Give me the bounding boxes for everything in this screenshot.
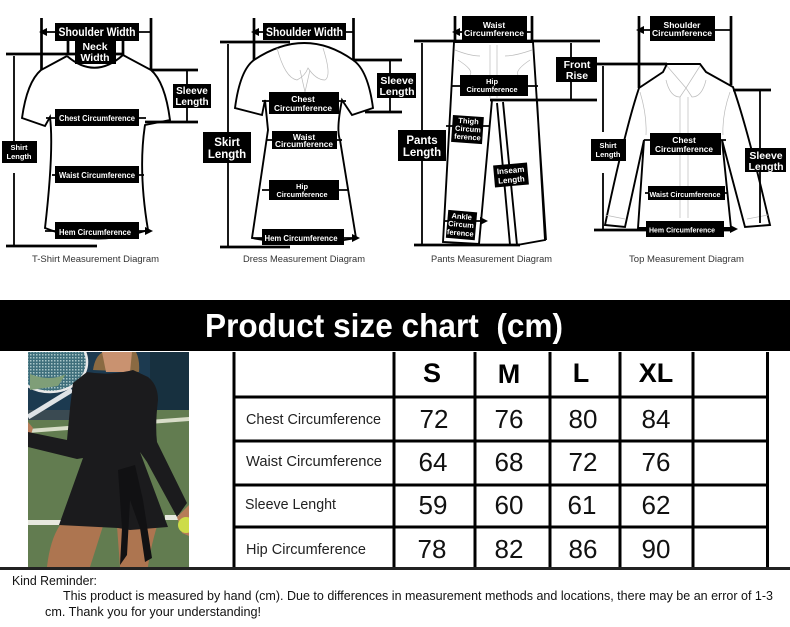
label: waist bbox=[648, 186, 725, 200]
label: thigh: Circum bbox=[455, 124, 482, 134]
label: ankle: Circum bbox=[448, 219, 475, 230]
row: hip circumference: 82 bbox=[495, 534, 523, 564]
label: pants length: Pants bbox=[406, 135, 438, 147]
t-shirt measure lines bbox=[6, 18, 198, 246]
label: hem bbox=[262, 229, 344, 245]
label: waist: Waist Circumference bbox=[59, 171, 135, 180]
label: hem: Hem Circumference bbox=[649, 226, 715, 234]
label: hip: Circumference bbox=[466, 85, 518, 94]
label: ankle bbox=[446, 210, 477, 240]
label: sleeve length: Length bbox=[748, 161, 784, 173]
label: neck width: Width bbox=[80, 52, 110, 64]
label: sleeve length bbox=[377, 73, 416, 98]
label: shirt length bbox=[591, 139, 626, 161]
label: shoulder: Circumference bbox=[652, 28, 712, 38]
label: inseam bbox=[493, 163, 529, 187]
tennis racket bbox=[28, 352, 88, 420]
label: shirt length: Shirt bbox=[599, 141, 617, 150]
row: chest circumference bbox=[246, 404, 670, 434]
row: sleeve length: Sleeve Lenght bbox=[245, 497, 336, 513]
label: ankle: Ankle bbox=[451, 211, 472, 222]
label: chest: Chest bbox=[672, 135, 696, 145]
label: waist bbox=[462, 16, 527, 41]
t-shirt arrows bbox=[14, 32, 187, 245]
caption: T-Shirt Measurement Diagram bbox=[32, 254, 159, 265]
pants outline bbox=[443, 42, 546, 245]
top diagram bbox=[591, 16, 786, 265]
label: front rise: Rise bbox=[566, 70, 588, 82]
label: hem bbox=[55, 222, 139, 239]
t-shirt diagram bbox=[2, 18, 211, 265]
row: sleeve length bbox=[245, 490, 670, 520]
title band bbox=[0, 300, 790, 351]
label: hip bbox=[269, 180, 339, 200]
row: chest circumference: Chest Circumference bbox=[246, 412, 381, 428]
label: shirt length: Length bbox=[596, 150, 621, 159]
pants arrows bbox=[422, 32, 571, 244]
label: hem: Hem Circumference bbox=[264, 234, 338, 243]
header row: M bbox=[498, 359, 520, 389]
court background bbox=[28, 410, 189, 567]
label: sleeve length bbox=[173, 84, 211, 108]
row: sleeve length: 59 bbox=[419, 490, 447, 520]
row: waist circumference: 68 bbox=[495, 447, 523, 477]
row: chest circumference: 76 bbox=[495, 404, 523, 434]
top outline bbox=[605, 64, 770, 228]
label: skirt length: Skirt bbox=[214, 137, 240, 149]
label: front rise bbox=[556, 57, 597, 82]
label: skirt length: Length bbox=[208, 149, 246, 161]
label: neck width: Neck bbox=[82, 41, 108, 53]
pants diagram bbox=[398, 16, 600, 265]
label: hem bbox=[646, 221, 724, 237]
label: chest bbox=[55, 109, 139, 126]
tennis ball bbox=[178, 517, 189, 533]
hair and skin bbox=[93, 352, 139, 372]
label: hip: Hip bbox=[296, 182, 308, 191]
row: waist circumference: 72 bbox=[569, 447, 597, 477]
caption: Dress Measurement Diagram bbox=[243, 254, 365, 265]
label: front rise: Front bbox=[564, 59, 591, 71]
label: sleeve length: Sleeve bbox=[380, 75, 414, 87]
label: shoulder width: Shoulder Width bbox=[266, 27, 343, 39]
label: chest: Circumference bbox=[274, 103, 332, 113]
label: sleeve length: Sleeve bbox=[749, 150, 783, 162]
header row bbox=[423, 358, 673, 389]
dress measure lines bbox=[220, 18, 402, 247]
label: sleeve length: Length bbox=[175, 97, 209, 108]
t-shirt outline bbox=[22, 55, 170, 239]
row: hip circumference: 78 bbox=[418, 534, 446, 564]
row: chest circumference: 72 bbox=[420, 404, 448, 434]
header row: L bbox=[573, 358, 589, 388]
bottom rule bbox=[0, 567, 790, 570]
row: waist circumference: Waist Circumference bbox=[246, 454, 382, 470]
black dress bbox=[28, 370, 187, 530]
label: shoulder width bbox=[263, 23, 346, 40]
label: chest bbox=[269, 92, 339, 114]
row: waist circumference bbox=[246, 447, 670, 477]
label: thigh: Thigh bbox=[458, 116, 479, 126]
row: hip circumference: 86 bbox=[569, 534, 597, 564]
pocket detail bbox=[455, 45, 532, 98]
dress arrows bbox=[228, 32, 390, 246]
dress diagram bbox=[203, 18, 416, 265]
row: waist circumference: 76 bbox=[642, 447, 670, 477]
product photo bbox=[28, 352, 189, 567]
row: sleeve length: 61 bbox=[568, 490, 596, 520]
label: sleeve length bbox=[745, 148, 786, 173]
label: chest: Chest Circumference bbox=[59, 114, 135, 123]
label: waist: Circumference bbox=[464, 28, 524, 38]
label: waist: Waist bbox=[483, 20, 505, 30]
label: inseam: Inseam bbox=[496, 165, 525, 176]
table grid bbox=[234, 352, 768, 569]
caption: Top Measurement Diagram bbox=[629, 254, 744, 265]
label: ankle: ference bbox=[447, 227, 474, 239]
label: waist bbox=[55, 166, 139, 183]
row: hip circumference bbox=[246, 534, 670, 564]
kind reminder: cm. Thank you for your understanding! bbox=[45, 604, 261, 619]
header row: XL bbox=[639, 358, 673, 388]
label: chest bbox=[650, 133, 721, 155]
dress outline bbox=[235, 43, 373, 243]
row: sleeve length: 60 bbox=[495, 490, 523, 520]
kind reminder bbox=[12, 573, 773, 619]
label: shoulder: Shoulder bbox=[664, 20, 701, 30]
label: thigh bbox=[451, 115, 484, 144]
label: waist bbox=[272, 131, 337, 149]
label: hip: Hip bbox=[486, 77, 498, 86]
label: shirt length bbox=[2, 141, 37, 163]
kind reminder: This product is measured by hand (cm). Due to differences in measurement methods and locations, there may be an error of 1-3 bbox=[63, 588, 773, 603]
collar and placket detail bbox=[605, 66, 768, 219]
label: waist: Circumference bbox=[275, 139, 333, 149]
label: chest: Circumference bbox=[655, 144, 713, 154]
label: shirt length: Shirt bbox=[10, 143, 28, 152]
label: pants length bbox=[398, 130, 446, 161]
label: thigh: ference bbox=[454, 132, 481, 142]
label: hem: Hem Circumference bbox=[59, 228, 131, 237]
title band: Product size chart (cm) bbox=[205, 307, 563, 344]
row: chest circumference: 80 bbox=[569, 404, 597, 434]
row: chest circumference: 84 bbox=[642, 404, 670, 434]
collar detail bbox=[277, 48, 328, 92]
row: waist circumference: 64 bbox=[419, 447, 447, 477]
size table bbox=[0, 352, 790, 570]
label: shoulder width bbox=[55, 23, 139, 41]
row: hip circumference: 90 bbox=[642, 534, 670, 564]
caption: Pants Measurement Diagram bbox=[431, 254, 552, 265]
top arrows bbox=[603, 30, 760, 229]
label: sleeve length: Length bbox=[380, 86, 414, 98]
label: shirt length: Length bbox=[6, 152, 32, 161]
kind reminder: Kind Reminder: bbox=[12, 573, 97, 588]
label: shoulder bbox=[650, 16, 715, 41]
top measure lines bbox=[594, 16, 771, 230]
pants measure lines bbox=[414, 16, 600, 245]
label: waist: Waist bbox=[293, 132, 315, 142]
label: neck width bbox=[75, 40, 116, 64]
label: hip: Circumference bbox=[276, 190, 328, 199]
dress tie bbox=[118, 465, 152, 565]
label: waist: Waist Circumference bbox=[650, 190, 720, 199]
label: pants length: Length bbox=[403, 147, 441, 159]
label: skirt length bbox=[203, 132, 251, 163]
label: sleeve length: Sleeve bbox=[176, 86, 208, 97]
label: inseam: Length bbox=[498, 174, 525, 186]
row: sleeve length: 62 bbox=[642, 490, 670, 520]
label: shoulder width: Shoulder Width bbox=[58, 27, 136, 39]
row: hip circumference: Hip Circumference bbox=[246, 542, 366, 558]
label: hip bbox=[460, 75, 528, 96]
label: chest: Chest bbox=[291, 94, 315, 104]
header row: S bbox=[423, 358, 441, 388]
